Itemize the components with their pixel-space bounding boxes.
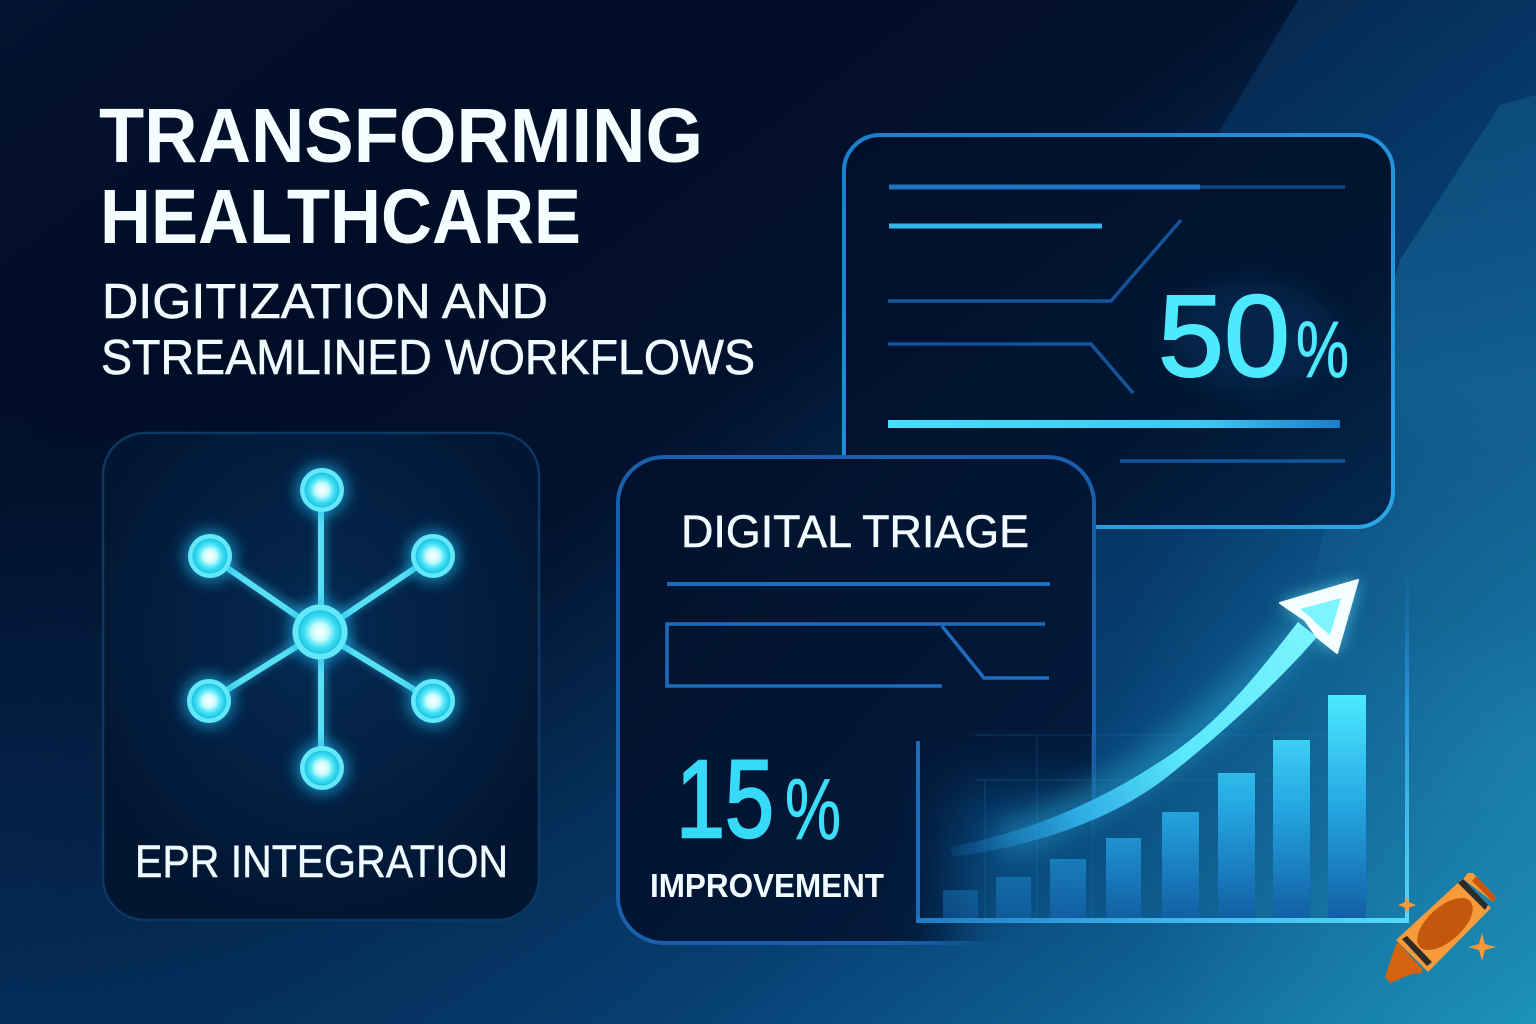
subtitle: DIGITIZATION AND — [102, 275, 548, 329]
icon: network hub — [184, 465, 458, 793]
arrow: growth — [950, 580, 1358, 857]
label: EPR integration: EPR INTEGRATION — [135, 836, 508, 887]
icon: crayon badge — [1385, 873, 1496, 983]
label: improvement: IMPROVEMENT — [650, 867, 884, 904]
schematic lines — [888, 187, 1345, 461]
chart grid — [975, 735, 1405, 918]
chart axes — [916, 578, 1409, 923]
sparkles — [1398, 896, 1416, 914]
chart: rising bars and arrow — [916, 578, 1409, 923]
panel: digital triage — [618, 457, 1094, 943]
metric: 15%: 15 — [676, 738, 774, 861]
heading: digital triage: DIGITAL TRIAGE — [681, 506, 1029, 557]
metric: 50% — [1158, 271, 1349, 401]
subtitle: STREAMLINED WORKFLOWS — [101, 331, 755, 385]
bars — [943, 695, 1366, 918]
crayon body — [1396, 880, 1491, 972]
schematic lines — [667, 584, 1050, 686]
metric: 50%: % — [1296, 305, 1349, 394]
metric: 15%: % — [785, 762, 841, 858]
metric: 50%: 50 — [1158, 271, 1290, 401]
title: TRANSFORMING — [99, 93, 703, 179]
title: HEALTHCARE — [100, 174, 581, 260]
title — [99, 93, 703, 260]
panel: EPR integration — [103, 433, 539, 920]
subtitle — [101, 275, 755, 385]
panel: 50% metric — [844, 135, 1393, 527]
